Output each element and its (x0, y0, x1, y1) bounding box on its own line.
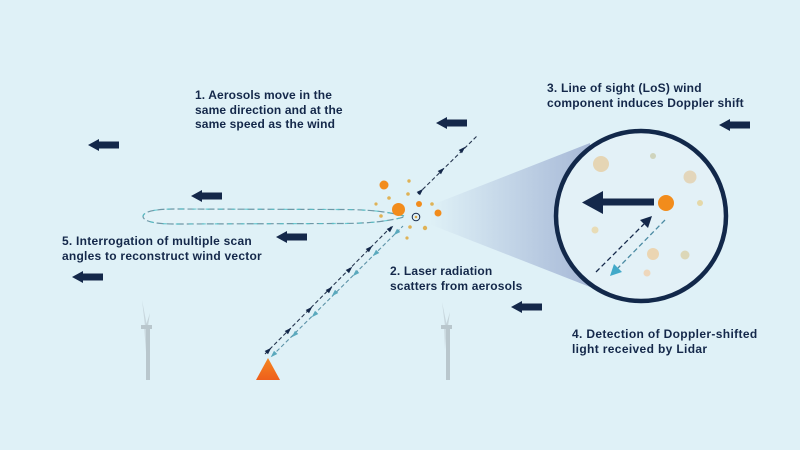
measurement point (412, 213, 420, 221)
orange aerosol (658, 195, 674, 211)
aerosol particles (374, 179, 442, 240)
wind arrows (72, 117, 750, 313)
lidar triangle (256, 358, 280, 380)
label 3: 3. Line of sight (LoS) wind (547, 81, 702, 95)
scan ellipse (143, 209, 404, 224)
wind turbine left (141, 300, 152, 380)
label 1 (195, 88, 343, 131)
light cone to magnified view (406, 143, 590, 287)
label 1: 1. Aerosols move in the (195, 88, 332, 102)
label 4 (572, 327, 758, 356)
label 2: scatters from aerosols (390, 278, 522, 292)
label 1: same speed as the wind (195, 117, 335, 131)
label 1: same direction and at the (195, 102, 343, 116)
label 5 (62, 234, 262, 262)
label 2 (390, 264, 522, 292)
outgoing arrow (596, 216, 652, 272)
label 3: component induces Doppler shift (547, 96, 744, 110)
magnified circle (556, 131, 726, 301)
label 4: light received by Lidar (572, 342, 707, 356)
backscattered beam (271, 226, 403, 357)
label 2: 2. Laser radiation (390, 264, 492, 278)
label 5: angles to reconstruct wind vector (62, 248, 262, 262)
label 3 (547, 81, 744, 110)
wind vector arrow (582, 191, 654, 214)
label 4: 4. Detection of Doppler-shifted (572, 327, 758, 341)
label 5: 5. Interrogation of multiple scan (62, 234, 252, 248)
background particles (592, 153, 703, 276)
outgoing laser beam (265, 136, 477, 354)
wind turbine right (441, 302, 452, 380)
return arrow (610, 220, 665, 276)
